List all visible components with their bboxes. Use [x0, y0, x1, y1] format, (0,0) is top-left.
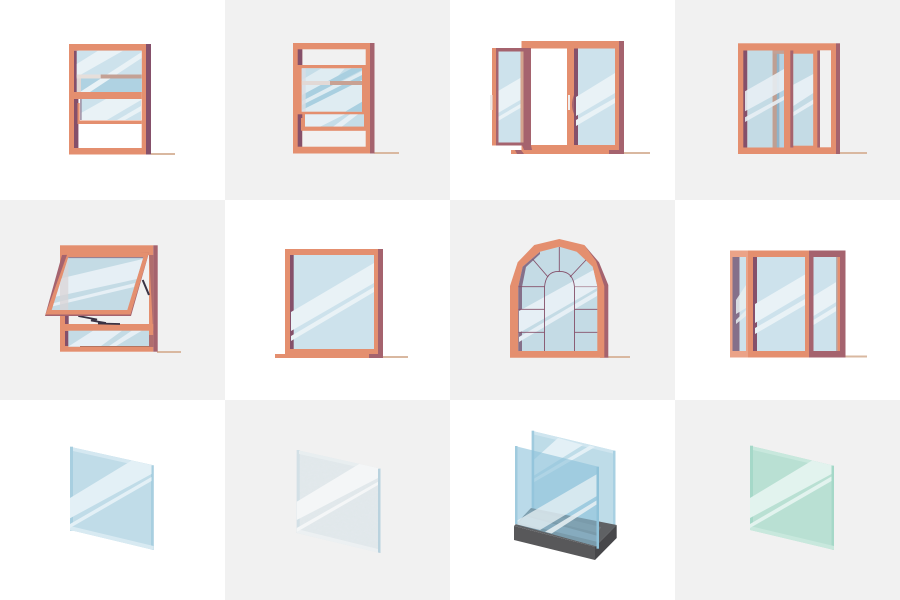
icon: single hung window	[69, 44, 175, 155]
icon: picture window	[275, 249, 408, 358]
icon: tinted green glass pane	[750, 446, 834, 550]
icon: clear glass pane	[70, 447, 154, 550]
icon: double hung window	[293, 43, 399, 154]
icon: arched window	[510, 239, 630, 358]
icon: awning window	[45, 245, 181, 353]
icon: bay window	[730, 250, 867, 358]
icon: textured glass pane	[297, 450, 381, 553]
icon: double glazed unit	[514, 431, 617, 560]
icon: sliding window	[738, 43, 867, 154]
window muntins	[518, 247, 597, 351]
icon: casement door window	[490, 41, 650, 154]
